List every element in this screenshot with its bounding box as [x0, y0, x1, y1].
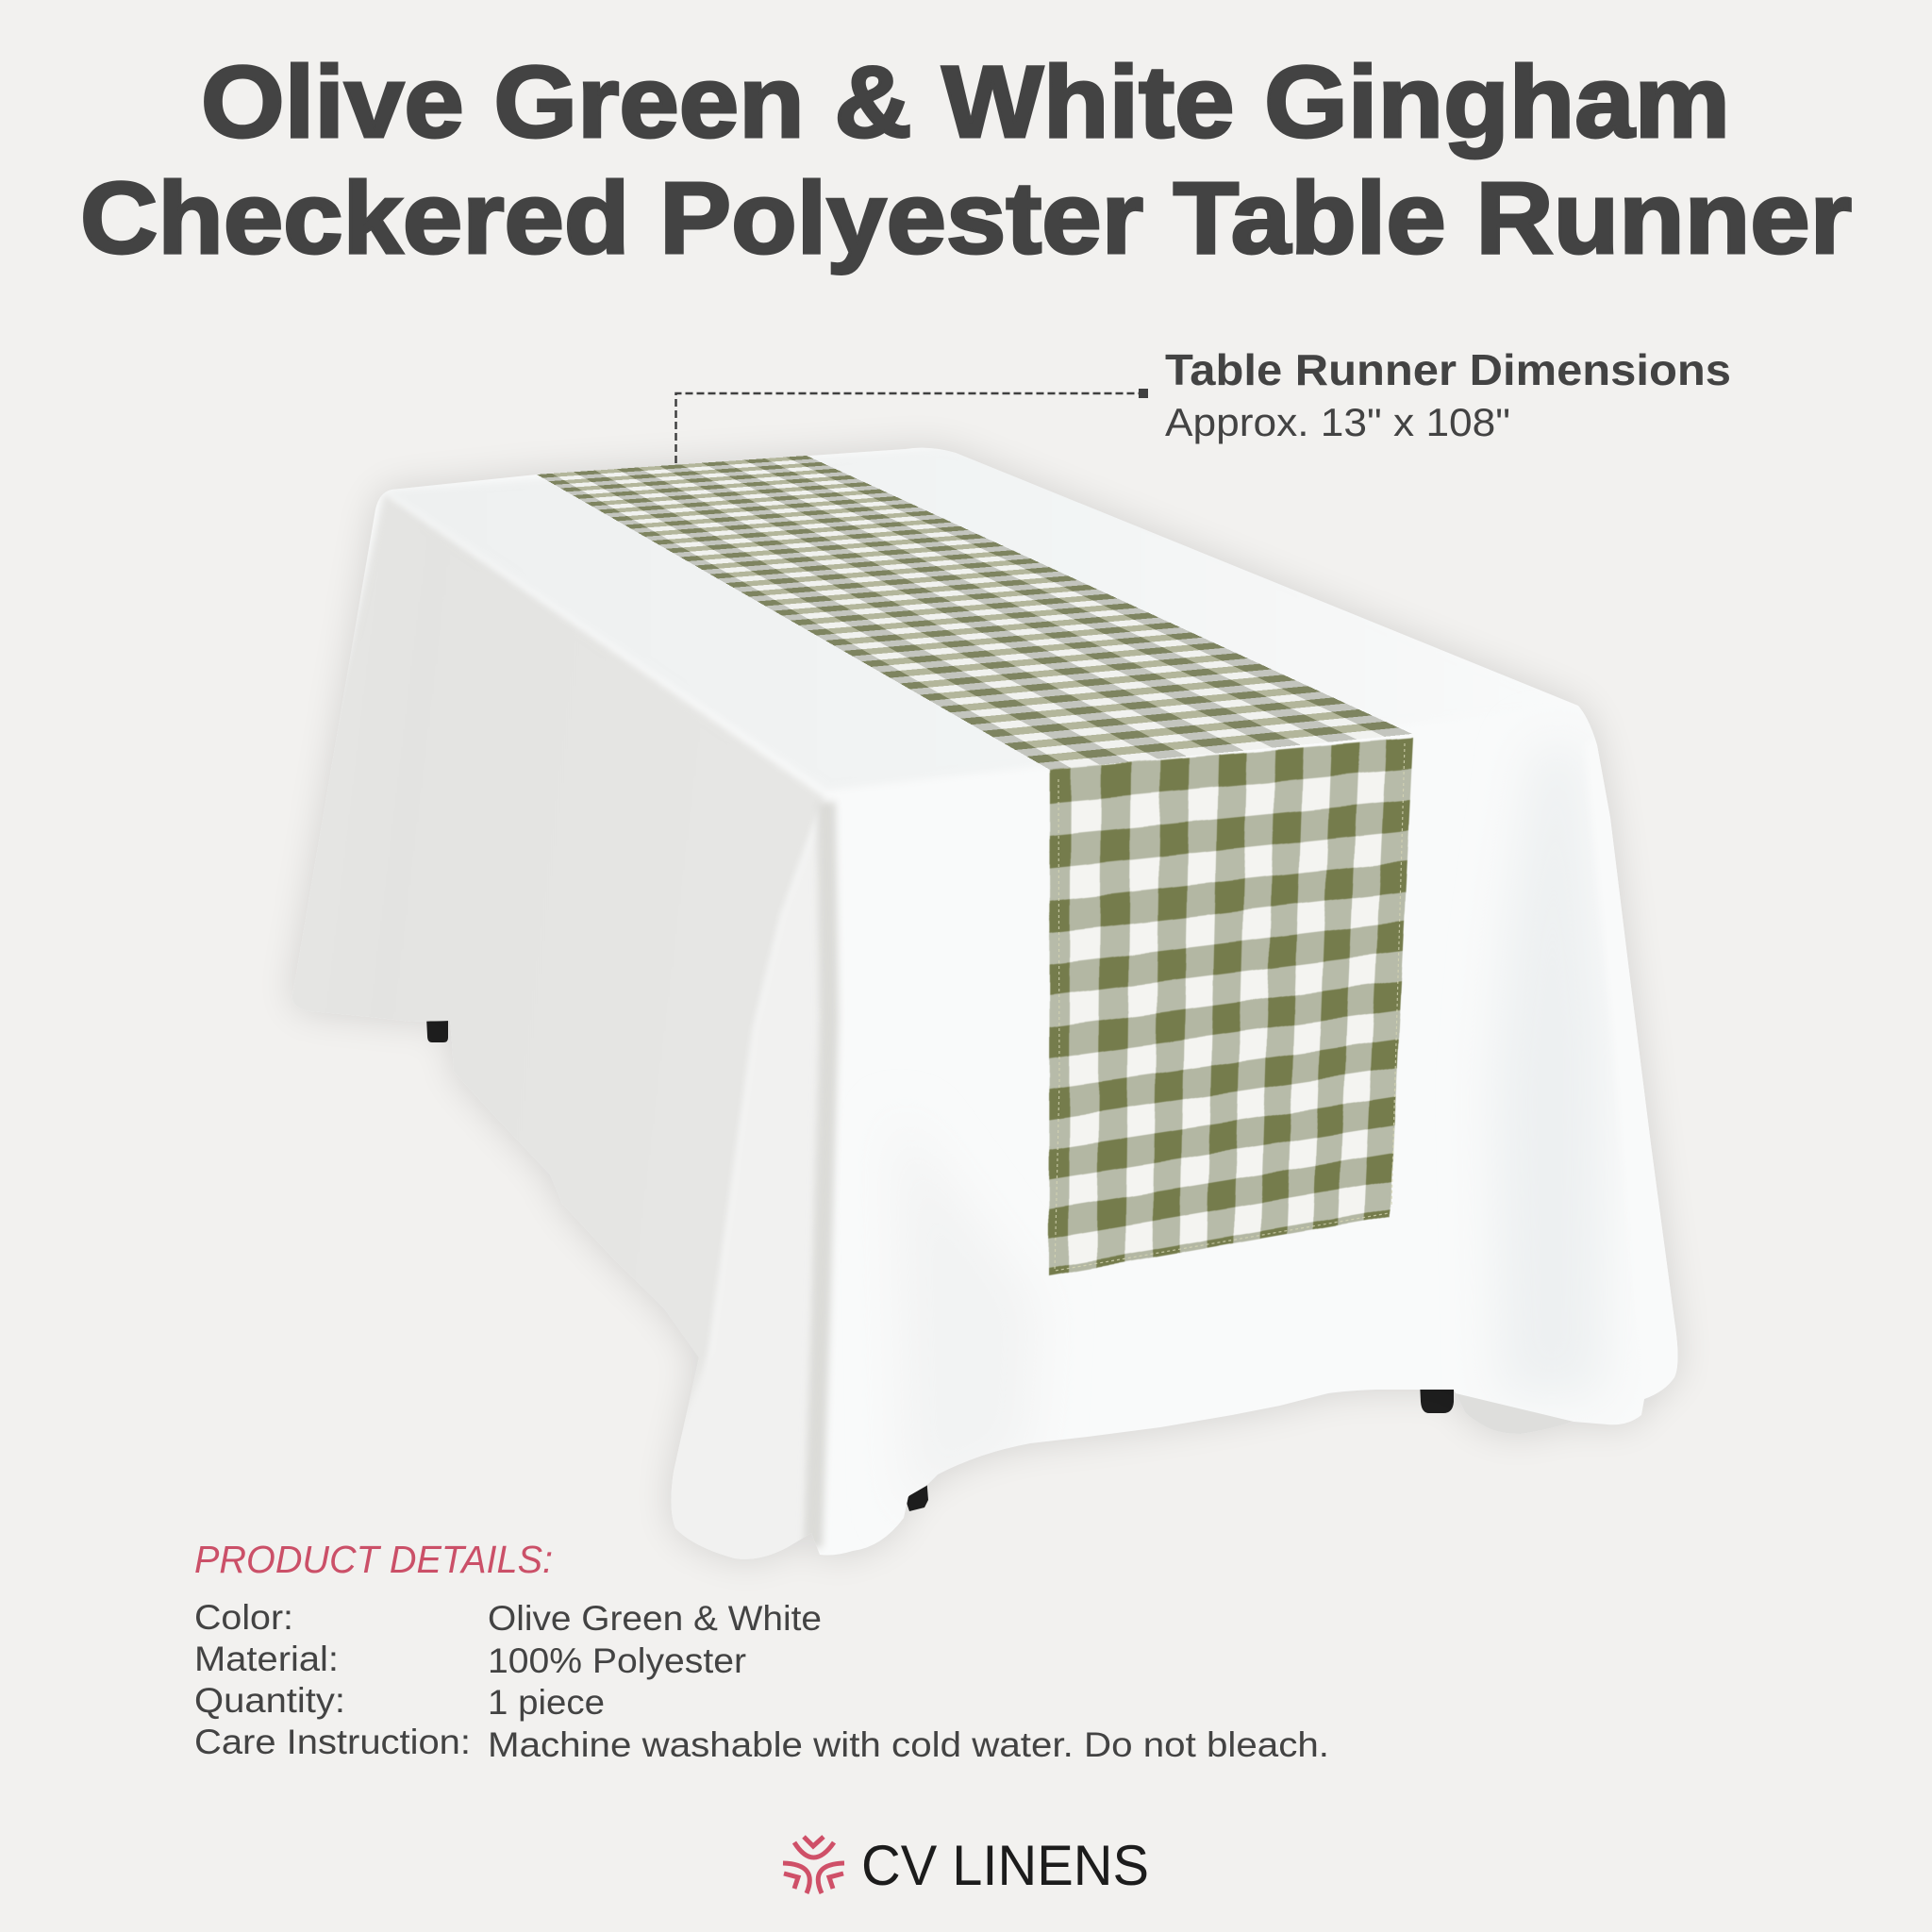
callout: dimensions: Approx. 13" x 108": [1165, 400, 1510, 444]
product details table: Olive Green & White: [488, 1599, 822, 1638]
left side face: [264, 492, 824, 1434]
table top face: [397, 462, 857, 783]
callout: dimensions: [1165, 345, 1731, 444]
product details table: Quantity:: [194, 1681, 345, 1720]
product details table: Material:: [194, 1640, 339, 1678]
table legs: [426, 1017, 1454, 1511]
title: Olive Green & White Gingham: [201, 44, 1730, 158]
logo wordmark: CV LINENS: [861, 1834, 1149, 1897]
right fold rim: [1585, 717, 1698, 1415]
callout connector: [675, 389, 1148, 463]
product details table: Care Instruction:: [194, 1723, 471, 1761]
underside flap: [1456, 1393, 1574, 1434]
product details table: 1 piece: [488, 1683, 605, 1722]
lower shading: [908, 1485, 927, 1502]
white cloth: [292, 448, 1677, 1559]
title: Checkered Polyester Table Runner: [80, 160, 1852, 275]
runner stitching: [1055, 743, 1405, 1271]
product details heading: PRODUCT DETAILS:: [194, 1538, 553, 1581]
crease: [813, 802, 829, 1547]
lighter fold band: [672, 849, 817, 1558]
runner on table top: [537, 456, 1412, 770]
product details table: [194, 1598, 1329, 1764]
icon: CV Linens logo mark: [783, 1837, 844, 1893]
runner hanging over the front: [1049, 738, 1413, 1275]
cloth drop shadow: [292, 448, 1677, 1559]
title: [80, 44, 1852, 275]
product details table: Machine washable with cold water. Do not bleach.: [488, 1725, 1329, 1764]
product details table: 100% Polyester: [488, 1641, 746, 1680]
callout: dimensions: Table Runner Dimensions: [1165, 345, 1731, 394]
tablecloth illustration: [286, 438, 1687, 1568]
product details table: Color:: [194, 1598, 293, 1637]
right shading: [1507, 778, 1594, 1383]
